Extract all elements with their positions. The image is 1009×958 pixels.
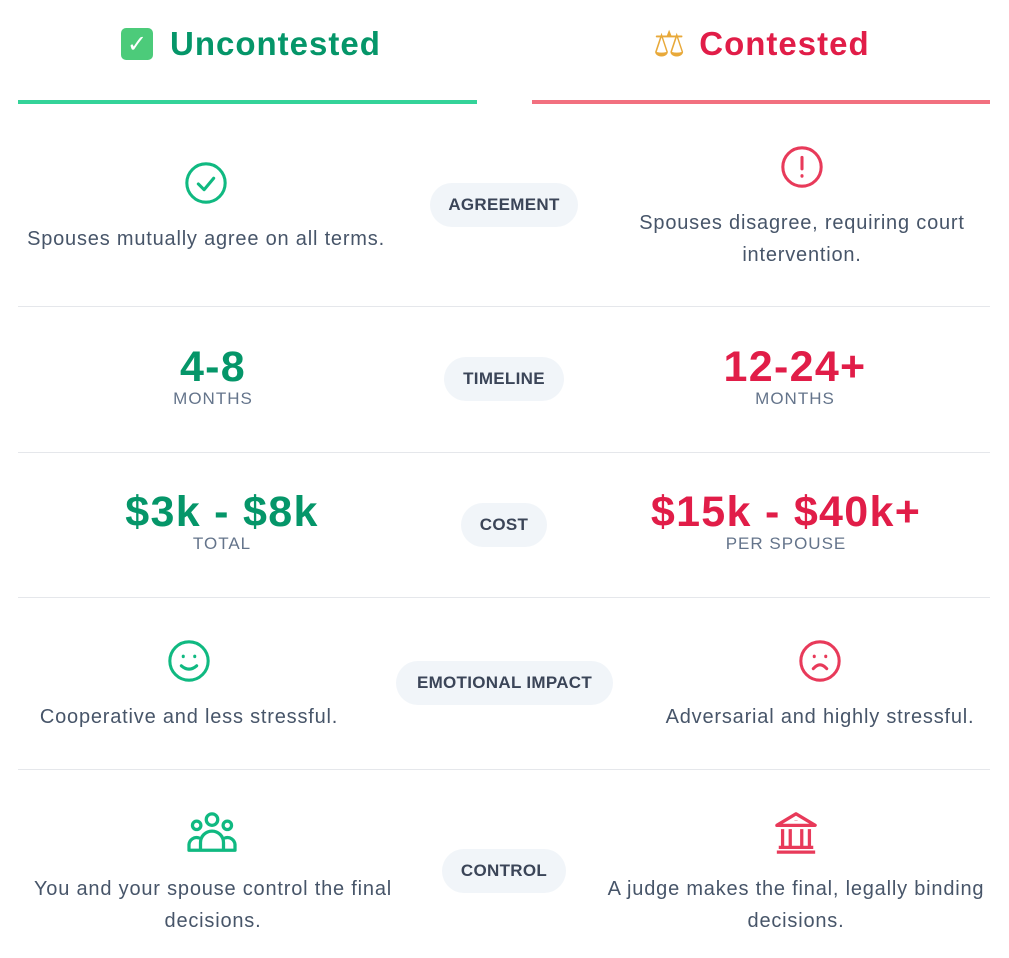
row: cost [125, 488, 921, 553]
row: timeline [173, 343, 866, 408]
value: 4-8 months [173, 343, 253, 408]
text: you control [34, 878, 392, 932]
bar: uncontested [18, 100, 477, 104]
text: judge [608, 878, 984, 932]
icon: alert circle [781, 146, 823, 188]
pill: control: CONTROL [461, 861, 547, 880]
row: control [34, 812, 984, 932]
value: 3k-8k: TOTAL [193, 534, 251, 553]
row: agreement [27, 146, 965, 266]
icon: people [187, 812, 237, 852]
icon: check box [121, 28, 153, 60]
pill: cost [461, 503, 547, 547]
icon: check circle [185, 162, 227, 204]
pill: cost: COST [480, 515, 528, 534]
text: disagree: Spouses disagree, requiring court [639, 212, 965, 234]
value: 15k-40k+: $15k - $40k+ [651, 488, 921, 536]
bar: contested [532, 100, 990, 104]
pill: agreement: AGREEMENT [448, 195, 560, 214]
text: agree: Spouses mutually agree on all terms. [27, 228, 385, 250]
row: emotional impact [40, 640, 974, 728]
value: 12-24+ months: MONTHS [755, 389, 835, 408]
value: 3k-8k: $3k - $8k [125, 488, 319, 536]
text: disagree: intervention. [742, 244, 862, 266]
text: you control: decisions. [165, 910, 261, 932]
pill: emotional impact: EMOTIONAL IMPACT [417, 673, 592, 692]
value: 15k-40k+: PER SPOUSE [726, 534, 846, 553]
pill: emotional impact [396, 661, 613, 705]
text: judge: decisions. [748, 910, 844, 932]
icon: smile [168, 640, 210, 682]
text: judge: A judge makes the final, legally binding [608, 878, 984, 900]
value: 12-24+ months: 12-24+ [724, 343, 866, 391]
value: 4-8 months: MONTHS [173, 389, 253, 408]
icon: check box: ✓ [127, 30, 147, 58]
heading: contested: Contested [699, 25, 870, 62]
pill: agreement [430, 183, 578, 227]
pill: control [442, 849, 566, 893]
text: adversarial: Adversarial and highly stressful. [666, 706, 974, 728]
value: 4-8 months: 4-8 [180, 343, 246, 391]
icon: sad [799, 640, 841, 682]
text: cooperative: Cooperative and less stressful. [40, 706, 338, 728]
text: disagree [639, 212, 965, 266]
icon: courthouse [775, 812, 817, 854]
heading: uncontested: Uncontested [170, 25, 381, 62]
pill: timeline: TIMELINE [463, 369, 545, 388]
text: you control: You and your spouse control the final [34, 878, 392, 900]
pill: timeline [444, 357, 564, 401]
icon: scales: ⚖ [653, 23, 685, 64]
